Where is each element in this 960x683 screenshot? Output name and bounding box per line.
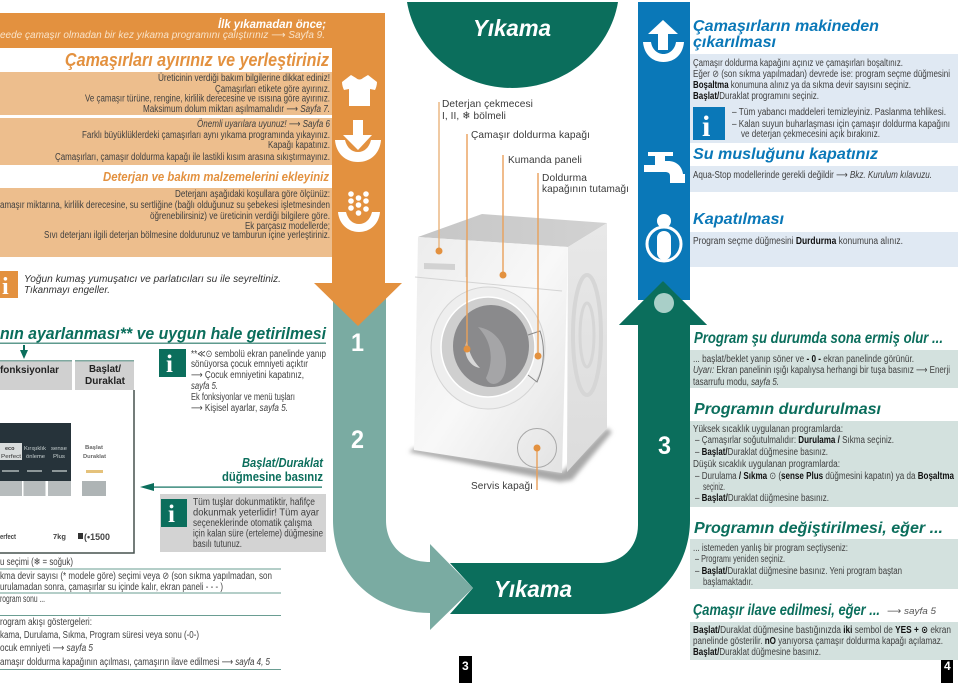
heading: before first wash [0, 16, 326, 41]
heading: sort and load: Çamaşırları ayırınız ve yerleştiriniz [65, 50, 329, 70]
text: changing program: – Başlat/Duraklat düğmesine basınız. Yeni program baştan [695, 566, 902, 577]
heading: program setting: nın ayarlanması** ve uygun hale getirilmesi [0, 324, 327, 343]
arrow head: green up arrow with dot [619, 281, 707, 340]
callout: child lock info: sönüyorsa çocuk emniyeti açıktır [191, 359, 309, 370]
panel: dark display strip: Kırışıklık [24, 446, 46, 452]
callout: softener info: Yoğun kumaş yumuşatıcı ve parlatıcıları su ile seyreltiniz. [24, 274, 281, 285]
label: model data [0, 532, 110, 543]
heading: adding laundry: Çamaşır ilave edilmesi, eğer ... [693, 602, 880, 619]
panel: close tap [690, 146, 958, 192]
text: load instructions: Önemli uyarılara uyunuz! ⟶ Sayfa 6 [197, 118, 330, 130]
heading shape: Yıkama top semicircle [407, 2, 618, 88]
label: control panel: Kumanda paneli [508, 154, 582, 166]
text: sort instructions: Ve çamaşır türüne, rengine, kirlilik derecesine ve ısısına göre ayırınız. [85, 94, 330, 104]
icon: on/off person [647, 214, 681, 261]
callout: touch buttons info [160, 494, 326, 552]
text: load instructions [55, 118, 330, 163]
text: adding laundry: Başlat/Duraklat düğmesine basınız. [693, 647, 821, 658]
panel: removing laundry: Boşaltma konumuna alınız ya da sıkma devir sayısını seçiniz. [693, 80, 911, 91]
label: start pause: Başlat/ [89, 363, 121, 375]
text: detergent instructions: Deterjanı aşağıdaki koşullara göre ölçünüz: [175, 189, 330, 200]
callout: touch buttons info: basılı tutunuz. [193, 539, 242, 550]
button: start pause: Başlat [85, 445, 103, 451]
callout: softener info: i [2, 274, 9, 300]
panel: stopping program [690, 401, 958, 507]
panel: removing laundry [690, 54, 958, 143]
text: stopping program: Düşük sıcaklık uygulanan programlarda: [693, 459, 840, 470]
callout: child lock info: i [166, 351, 173, 378]
heading: press start pause [222, 456, 324, 484]
label: detergent drawer: Deterjan çekmecesi [442, 98, 533, 110]
text: aqua stop: Aqua-Stop modellerinde gerekli değildir ⟶ Bkz. Kurulum kılavuzu. [693, 170, 932, 181]
list: display legend: kama, Durulama, Sıkma, Program süresi veya sonu (-0-) [0, 630, 199, 641]
label: door handle [542, 172, 629, 195]
panel: switching off [690, 211, 958, 267]
icon: info blue: i [702, 110, 710, 143]
text: adding laundry: Başlat/Duraklat düğmesine bastığınızda iki sembol de YES + ⊙ ekran [693, 625, 951, 636]
callout: touch buttons info: için kalan süre (erteleme) düğmesine [193, 528, 323, 540]
panel: adding laundry [690, 602, 958, 660]
label: door handle: Doldurma [542, 172, 587, 184]
callout: touch buttons info: Tüm tuşlar dokunmatiktir, hafifçe [193, 497, 315, 508]
panel: dark display strip: eco [5, 446, 15, 452]
shadow [409, 428, 612, 482]
heading: close tap: Su musluğunu kapatınız [693, 146, 878, 163]
list: display legend [0, 557, 281, 670]
panel: dark display strip: sense [51, 446, 67, 452]
text: changing program: ... istemeden yanlış bir program seçtiyseniz: [693, 543, 848, 554]
text: stopping program [693, 424, 954, 504]
list: display legend: rogram akışı göstergeleri: [0, 617, 92, 628]
callout: child lock info: **≪⊙ sembolü ekran panelinde yanıp [191, 349, 326, 360]
arrow: down to functions [20, 345, 28, 359]
callout: touch buttons info: dokunmak yeterlidir! Tüm ayar [193, 508, 320, 518]
panel: dark display strip: Perfect [1, 454, 22, 460]
text: detergent instructions: Ek parçasız modellerde; [245, 221, 330, 232]
label: door handle: kapağının tutamağı [542, 183, 629, 195]
page number 4: 4 [944, 659, 951, 673]
illustration: washing machine [409, 102, 612, 490]
panel: add detergent [0, 169, 332, 257]
panel: sort and load laundry [0, 50, 332, 165]
text: adding laundry [693, 625, 951, 658]
label: loading door: Çamaşır doldurma kapağı [471, 129, 590, 141]
heading: switching off: Kapatılması [693, 211, 784, 228]
text: detergent instructions: öğrenebilirsiniz) ve üreticinin verdiği bilgilere göre. [150, 211, 330, 222]
step number 3: 3 [658, 432, 671, 460]
text: info notes: ve deterjan çekmecesini açık bırakınız. [741, 129, 880, 140]
diagram: control panel [0, 360, 134, 553]
text: sort instructions [85, 72, 330, 115]
list: display legend: amaşır doldurma kapağının açılması, çamaşırın ilave edilmesi ⟶ sayfa 4, 5 [0, 657, 270, 668]
heading: removing laundry: çıkarılması [693, 34, 776, 51]
text: detergent instructions [0, 189, 330, 241]
icon: detergent dots [338, 191, 380, 232]
button: start pause [82, 445, 106, 496]
callout: child lock info: ⟶ Çocuk emniyetini kapatınız, [191, 370, 304, 381]
text: stopping program: seçiniz. [703, 482, 725, 493]
label: model data: erfect [0, 534, 17, 541]
label: model data: 7kg [53, 532, 66, 541]
text: detergent instructions: amaşır miktarına, kirlilik derecesine, su sertliğine (bağlı olduğunuz su şebekesi işletmesinden [0, 200, 330, 211]
label: service cover: Servis kapağı [471, 480, 533, 492]
page number 3: 3 [462, 659, 469, 673]
text: detergent instructions: Sıvı deterjanı ilgili deterjan bölmesine doldurunuz ve tamburun içine yerleştiriniz. [44, 230, 330, 241]
text: stopping program: Yüksek sıcaklık uygulanan programlarda: [693, 424, 843, 435]
heading: removing laundry [693, 18, 879, 51]
text: changing program: başlamaktadır. [703, 577, 753, 588]
panel: blue column [638, 2, 690, 300]
heading: press start pause: düğmesine basınız [222, 470, 323, 484]
page number 3 [459, 656, 472, 683]
text: stopping program: – Çamaşırlar soğutulmalıdır: Durulama / Sıkma seçiniz. [695, 435, 894, 446]
heading shape: Yıkama top semicircle: Yıkama [473, 15, 551, 41]
text: changing program: – Programı yeniden seçiniz. [695, 554, 785, 565]
text: switching off: Program seçme düğmesini Durdurma konumuna alınız. [693, 236, 903, 247]
list: display legend: ocuk emniyeti ⟶ sayfa 5 [0, 643, 93, 654]
text: sort instructions: Üreticinin verdiği bakım bilgilerine dikkat ediniz! [158, 72, 330, 84]
text: changing program [693, 543, 902, 588]
list: display legend: rogram sonu ... [0, 594, 45, 605]
step number 1: 1 [351, 329, 364, 357]
panel: dark display strip [0, 423, 71, 496]
icon: laundry out [643, 20, 684, 62]
callout lines and dots [436, 102, 542, 490]
panel: orange preparation column [0, 13, 402, 326]
heading: add detergent: Deterjan ve bakım malzemelerini ekleyiniz [103, 169, 329, 184]
text: program finished: ... başlat/beklet yanıp söner ve - 0 - ekran panelinde görünür. [693, 354, 914, 365]
callout: child lock info [159, 349, 326, 414]
text: page reference: ⟶ sayfa 5 [887, 606, 937, 617]
list: display legend: u seçimi (❄ = soğuk) [0, 557, 73, 568]
callout: softener info: Tıkanmayı engeller. [24, 285, 110, 296]
text: stopping program: – Başlat/Duraklat düğmesine basınız. [695, 447, 828, 458]
panel: program finished [690, 330, 958, 388]
callout: touch buttons info: i [168, 501, 175, 528]
label: model data: (•1500 [84, 532, 110, 543]
heading: press start pause: Başlat/Duraklat [242, 456, 324, 470]
panel: dark display strip: önleme [26, 454, 45, 460]
list: display legend: kma devir sayısı (* modele göre) seçimi veya ⊘ (son sıkma yapılmadan, son [0, 571, 272, 582]
callout: child lock info: sayfa 5. [191, 381, 218, 392]
heading: removing laundry: Çamaşırların makineden [693, 18, 879, 35]
list: display legend: urulamadan sonra, çamaşırlar su içinde kalır, ekran paneli - - - ) [0, 582, 223, 593]
icon: info blue [693, 107, 725, 143]
label: functions: fonksiyonlar [0, 364, 59, 376]
callout: child lock info: ⟶ Kişisel ayarlar, sayfa 5. [191, 403, 288, 414]
label: detergent drawer: I, II, ❄ bölmeli [442, 110, 506, 122]
heading: changing program: Programın değiştirilmesi, eğer ... [694, 520, 943, 537]
text: load instructions: Çamaşırları, çamaşır doldurma kapağı ile lastikli kısım arasına sıkıştırmayınız. [55, 152, 330, 163]
heading: Yıkama bottom: Yıkama [494, 576, 572, 602]
page number 4 [941, 657, 953, 683]
callout: touch buttons info: seçeneklerinde otomatik çalışma [193, 518, 312, 529]
text: program finished [693, 354, 950, 388]
icon: shirt [342, 75, 377, 106]
text: sort instructions: Maksimum dolum miktarı aşılmamalıdır ⟶ Sayfa 7. [143, 104, 330, 115]
text: stopping program: – Durulama / Sıkma ⊙ (sense Plus düğmesini kapatın) ya da Boşaltma [695, 471, 954, 482]
label: start pause: Duraklat [85, 375, 125, 387]
step number 2: 2 [351, 426, 364, 454]
text: load instructions: Kapağı kapatınız. [268, 140, 330, 151]
heading: stopping program: Programın durdurulması [694, 401, 881, 418]
arrow: to start pause button [140, 483, 322, 491]
text: load instructions: Farklı büyüklüklerdeki çamaşırları aynı yıkama programında yıkayınız. [82, 130, 330, 141]
label: start pause [85, 363, 125, 387]
text: info notes [732, 107, 950, 140]
panel: removing laundry: Başlat/Duraklat programını seçiniz. [693, 91, 819, 102]
heading: before first wash: İlk yıkamadan önce; [218, 16, 326, 31]
text: program finished: tasarrufu modu, sayfa 5. [693, 377, 779, 388]
label: detergent drawer [442, 98, 533, 122]
callout: child lock info: Ek fonksiyonlar ve menü tuşları [191, 392, 295, 403]
text: stopping program: – Başlat/Duraklat düğmesine basınız. [695, 493, 829, 504]
icon: water tap [644, 152, 685, 183]
text: first wash note: eede çamaşır olmadan bir kez yıkama programını çalıştırınız ⟶ Sayfa 9. [0, 30, 325, 41]
panel: changing program [690, 520, 958, 589]
text: sort instructions: Çamaşırları etikete göre ayırınız. [215, 84, 330, 95]
panel: dark display strip: Plus [53, 454, 65, 460]
callout: softener info [0, 271, 281, 300]
icon: load down [335, 120, 381, 162]
arrow: dark green flow arrow with Yıkama [450, 281, 707, 614]
button: start pause: Duraklat [83, 454, 106, 460]
panel: removing laundry: Çamaşır doldurma kapağını açınız ve çamaşırları boşaltınız. [693, 58, 903, 69]
arrow: light teal flow arrow 2 [333, 290, 473, 630]
